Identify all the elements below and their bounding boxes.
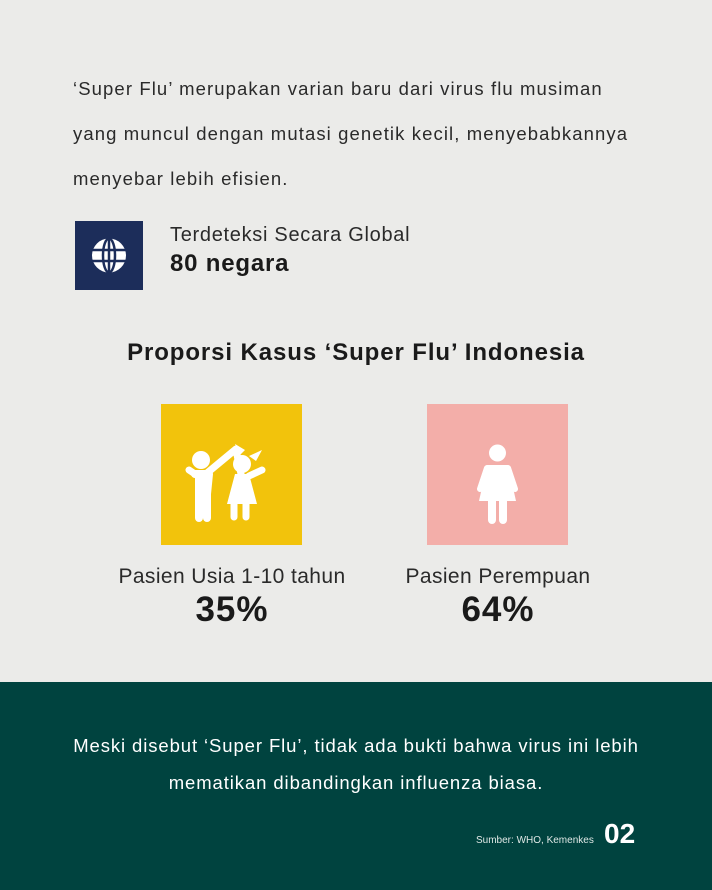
heading: Proporsi Kasus ‘Super Flu’ Indonesia	[127, 339, 585, 366]
footer note: Meski disebut ‘Super Flu’, tidak ada bukti bahwa virus ini lebih	[73, 735, 639, 756]
intro text: menyebar lebih efisien.	[73, 168, 289, 189]
stat: children: Pasien Usia 1-10 tahun	[118, 565, 346, 588]
stat: global	[170, 224, 410, 277]
footer note	[73, 735, 639, 793]
page number: 02	[604, 818, 635, 849]
stat: women: Pasien Perempuan	[405, 565, 590, 588]
icon: globe box	[75, 221, 143, 290]
stat: women	[405, 565, 590, 629]
stat: global: 80 negara	[170, 250, 289, 277]
stat: children	[118, 565, 346, 629]
source: Sumber: WHO, Kemenkes	[476, 835, 594, 846]
stat: global: Terdeteksi Secara Global	[170, 224, 410, 246]
icon: woman	[427, 404, 568, 545]
intro text: yang muncul dengan mutasi genetik kecil, menyebabkannya	[73, 123, 628, 144]
stat: women: 64%	[461, 590, 535, 629]
icon: children	[161, 404, 302, 545]
intro text: ‘Super Flu’ merupakan varian baru dari virus flu musiman	[73, 78, 603, 99]
footer panel	[0, 682, 712, 890]
intro text	[73, 78, 628, 189]
stat: children: 35%	[195, 590, 269, 629]
footer note: mematikan dibandingkan influenza biasa.	[169, 772, 543, 793]
